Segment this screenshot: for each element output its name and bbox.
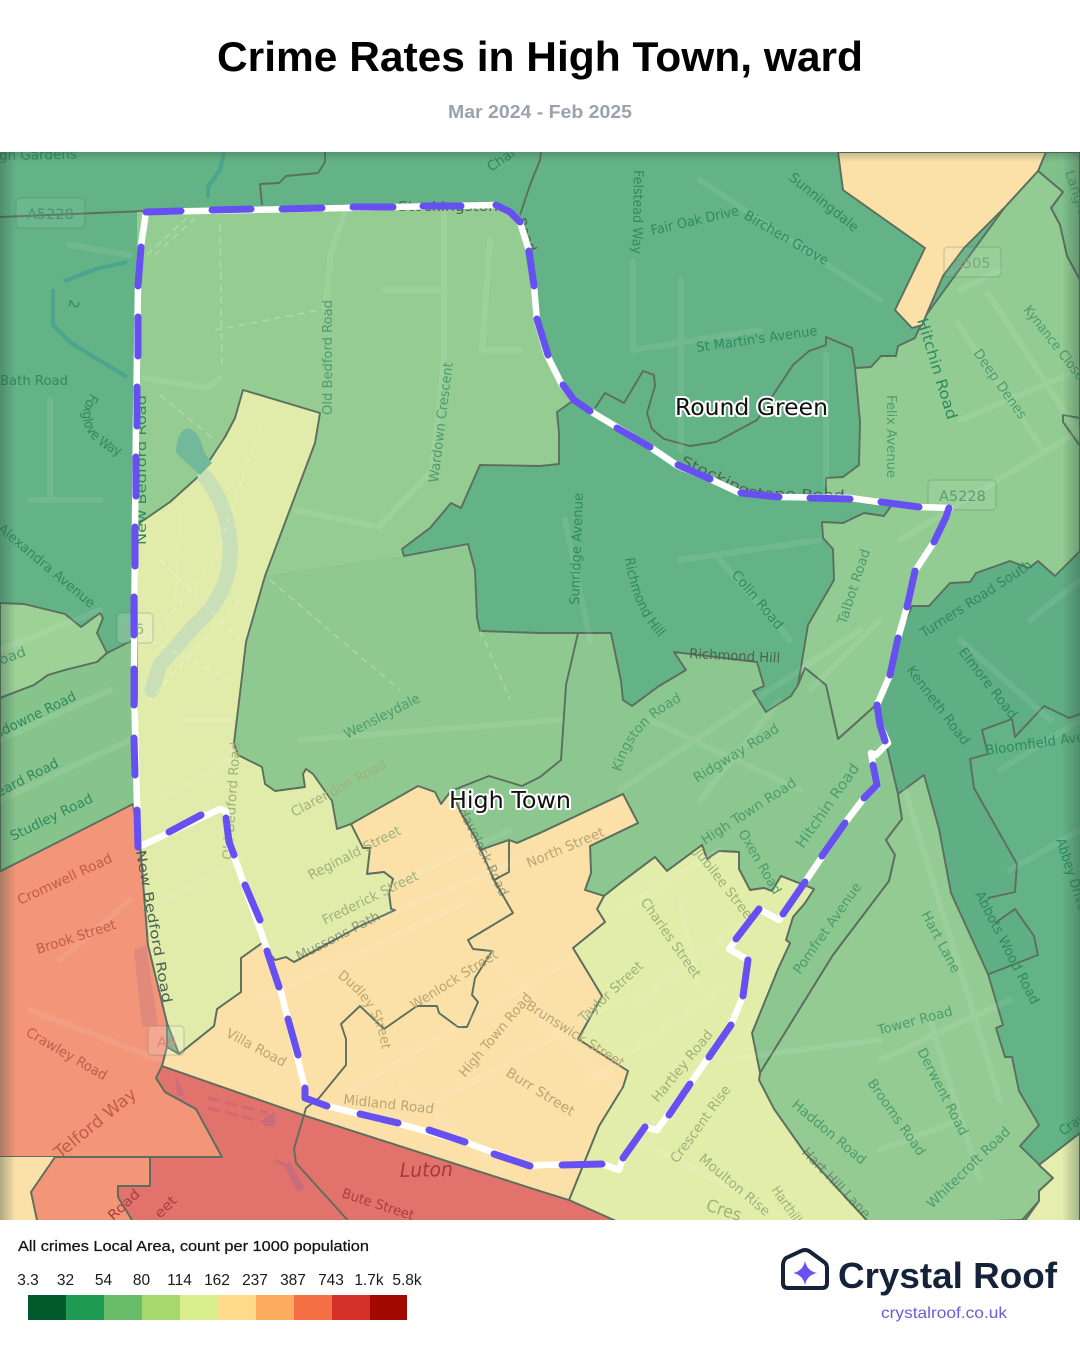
road labels: gh Gardens	[0, 147, 77, 164]
road labels: Cres	[703, 1196, 744, 1226]
legend values: 80	[133, 1272, 150, 1289]
legend values: 162	[204, 1272, 230, 1289]
east dark band	[876, 551, 1080, 974]
pond on north-west zone	[176, 428, 212, 475]
road labels: Brooms Road	[864, 1076, 928, 1159]
road labels: Deep Denes	[970, 346, 1030, 422]
zone outline north	[260, 152, 325, 205]
road labels: Jubilee Street	[690, 845, 759, 926]
road labels: Stockingston	[398, 199, 498, 215]
road labels: eet	[152, 1193, 181, 1222]
icon: purple star	[793, 1261, 817, 1285]
road labels: Sunningdale	[785, 170, 862, 236]
road labels: Wenlock Street	[408, 947, 501, 1013]
map edge vignette	[0, 152, 1080, 1220]
east zone outline: Abbots Wood	[989, 909, 1038, 974]
road labels: Wensleydale	[342, 691, 423, 743]
road badge: A6 north: A6	[125, 622, 144, 638]
road labels: Stockingstone Road	[684, 456, 844, 495]
road labels: Dudley Street	[338, 970, 391, 1050]
south-east yellow corner	[1022, 1133, 1080, 1225]
road labels: Pomfret Avenue	[790, 880, 865, 977]
road labels: Hitchin Road	[793, 761, 863, 851]
legend	[17, 1238, 422, 1320]
east zone outlines	[970, 706, 1080, 898]
road labels: St Martin's Avenue	[695, 323, 818, 356]
road badge: A5228 west	[16, 198, 85, 228]
water: pond and river in strip	[152, 477, 230, 690]
road labels: Chal	[484, 145, 518, 175]
road labels: Haddon Road	[788, 1097, 869, 1168]
road labels: Turners Road South	[917, 557, 1035, 642]
legend title: All crimes Local Area, count per 1000 population	[18, 1238, 369, 1255]
legend colour scale	[28, 1295, 407, 1320]
road labels: Colin Road	[728, 567, 786, 633]
road badge: A6 south	[148, 1026, 184, 1055]
road labels: Hitchin Road	[913, 316, 961, 422]
road labels: Studley Road	[8, 791, 96, 845]
cream zone interior boundaries	[294, 841, 513, 1225]
road labels: Sunridge Avenue	[567, 493, 587, 605]
road labels: Birchen Grove	[741, 208, 831, 269]
road labels: Harthill	[768, 1183, 805, 1227]
ward boundary: white line	[134, 205, 950, 1170]
road labels: Old Bedford Road	[320, 300, 336, 415]
road badge: A6 south: A6	[157, 1035, 176, 1051]
road labels: Taylor Street	[575, 958, 647, 1027]
legend values: 54	[95, 1272, 112, 1289]
road labels: Villa Road	[223, 1025, 289, 1071]
road labels: New Bedford Road	[132, 849, 175, 1004]
zone outline north east	[520, 152, 541, 215]
road labels: Old Bedford Road	[220, 741, 244, 860]
salmon zone lower left	[31, 1157, 150, 1225]
subtitle: date range: Mar 2024 - Feb 2025	[448, 102, 632, 122]
road labels: Whitecroft Road	[924, 1124, 1014, 1212]
road labels: Road	[512, 216, 539, 254]
road labels: Charles Street	[637, 895, 704, 981]
east ward zone: Charles Street	[569, 845, 871, 1225]
road labels: Richmond Hill	[689, 646, 781, 667]
legend values: 237	[242, 1272, 268, 1289]
north-west ward zone	[137, 205, 574, 576]
road labels: Felstead Way	[629, 170, 646, 254]
road labels: Crescent Rise	[667, 1083, 734, 1166]
legend values: 32	[57, 1272, 74, 1289]
ward boundary	[134, 205, 950, 1170]
legend values: 3.3	[17, 1272, 39, 1289]
station block	[175, 1075, 305, 1192]
north-east light green zone	[798, 171, 1080, 739]
road labels: Fair Oak Drive	[649, 203, 741, 239]
road badge: A5228 west: A5228	[27, 207, 74, 223]
road labels: Abbots Wood Road	[971, 889, 1042, 1007]
road labels: Midland Road	[343, 1092, 435, 1117]
legend values: 743	[318, 1272, 344, 1289]
road labels: Crawley Road	[23, 1025, 110, 1084]
road labels: Brunswick Street	[523, 998, 627, 1071]
title: Crime Rates in High Town, ward	[217, 33, 863, 80]
central dark zone outline	[402, 385, 578, 633]
road labels: Brook Street	[34, 917, 118, 958]
road labels: Cromwell Road	[15, 851, 115, 909]
central zone: Wensleydale	[234, 544, 578, 829]
legend values	[17, 1272, 422, 1289]
road labels: Hartley Road	[649, 1027, 716, 1106]
road labels: Telford Way	[50, 1084, 141, 1164]
salmon zone west	[0, 804, 222, 1157]
road labels: Tower Road	[875, 1003, 954, 1039]
road labels: Ridgway Road	[691, 721, 782, 786]
road labels: Wardown Crescent	[426, 361, 457, 483]
top-left zone outlines	[0, 211, 145, 217]
road badge: A505: A505	[953, 256, 991, 272]
legend values: 1.7k	[354, 1272, 384, 1289]
west lower light zone	[0, 640, 137, 872]
road labels: Richmond Hill	[625, 558, 666, 637]
road labels: Hart Hill Lane	[798, 1145, 874, 1222]
road labels: New Bedford Road	[134, 395, 150, 545]
road labels: High Town Road	[456, 990, 536, 1081]
icon: house	[783, 1250, 827, 1288]
road labels: Luton	[400, 1157, 453, 1182]
water: stream in top left	[53, 152, 224, 377]
ward boundary: purple dashes	[134, 205, 949, 1166]
road labels: Kingston Road	[612, 692, 681, 770]
road labels: Bute Street	[340, 1186, 416, 1224]
road badge: A6 north	[117, 613, 153, 643]
logo	[783, 1250, 1058, 1322]
road labels: Derwent Road	[913, 1046, 971, 1138]
road labels: Moulton Rise	[695, 1151, 773, 1220]
railway patch in salmon zone	[134, 945, 158, 1027]
road labels: Hart Lane	[917, 908, 964, 976]
legend values: 5.8k	[392, 1272, 422, 1289]
road labels: 2	[65, 298, 82, 310]
legend values: 387	[280, 1272, 306, 1289]
road labels: Oxen Road	[735, 827, 784, 897]
cream zone: High Town centre	[162, 786, 638, 1200]
road badge: A505	[944, 247, 1001, 277]
red zone: Luton centre	[118, 1066, 625, 1225]
footpaths in parks	[147, 215, 510, 700]
place label: High Town: High Town	[449, 788, 571, 814]
west upper light zone	[0, 603, 107, 698]
road labels: Reginald Street	[306, 823, 404, 884]
brand name: Crystal Roof	[838, 1255, 1058, 1296]
cream zone south-west corner	[0, 1157, 55, 1225]
Round Green inner zone outline	[595, 337, 855, 446]
zone: Hart Lane	[759, 775, 1053, 1225]
road labels: Talbot Road	[834, 547, 874, 627]
legend values: 114	[167, 1272, 192, 1289]
website: crystalroof.co.uk	[881, 1305, 1008, 1322]
road labels: Elmore Road	[955, 645, 1020, 722]
road labels: Road	[105, 1186, 144, 1224]
road labels: High Town Road	[698, 775, 799, 848]
west ward strip: yellow zone	[137, 390, 395, 1054]
road labels: Frederick Street	[320, 868, 421, 929]
cream zone interior boundary: Havelock	[494, 840, 509, 880]
light green zone far right corner	[1038, 152, 1080, 280]
road badge: A5228 east	[928, 480, 996, 510]
road labels: Havelock Road	[454, 805, 511, 899]
road labels: Mussons Path	[294, 909, 383, 965]
road labels: Bath Road	[0, 373, 68, 389]
road labels: Felix Avenue	[883, 395, 899, 478]
place label: Round Green: Round Green	[675, 395, 828, 421]
road labels: Burr Street	[503, 1065, 578, 1120]
road labels: Kenneth Road	[903, 663, 973, 748]
road labels: Clarendon Road	[288, 757, 389, 821]
eastern zone: Ridgway	[451, 633, 902, 1073]
local road network	[0, 180, 1080, 1220]
north-east cream zone	[838, 152, 1046, 328]
railway platforms in red zone	[208, 1098, 285, 1165]
road labels: Foxglove Way	[80, 394, 122, 457]
road labels: North Street	[524, 825, 607, 872]
road badge: A5228 east: A5228	[939, 489, 986, 505]
